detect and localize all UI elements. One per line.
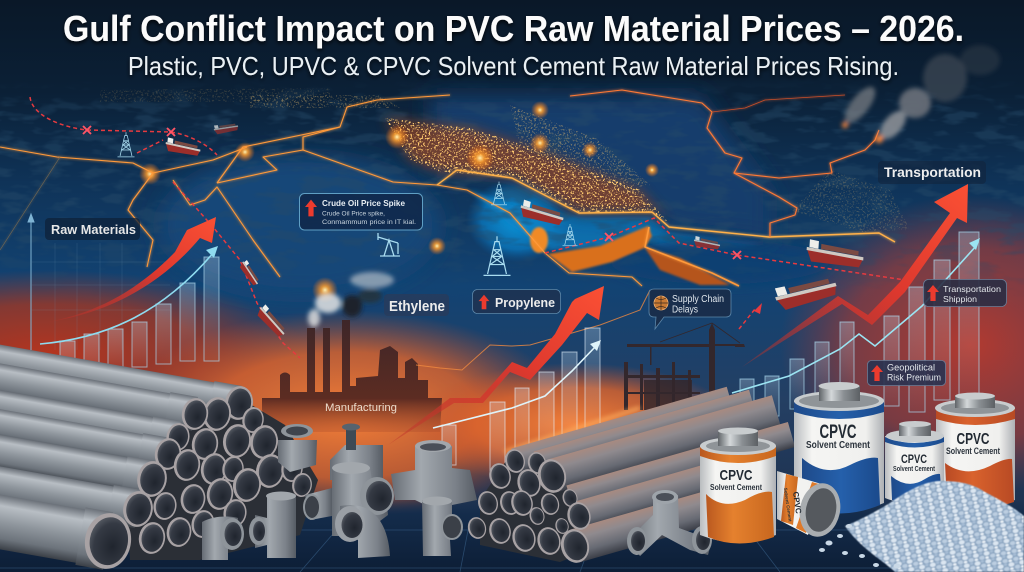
- bars: [740, 232, 979, 419]
- cyan arrow: [732, 245, 977, 393]
- callout: geopolitical risk premium: [868, 360, 946, 386]
- floor grid: [0, 520, 1024, 572]
- can: small blue solvent cement: CPVC: [901, 452, 927, 466]
- smoke: factory: [308, 272, 394, 327]
- axis: [28, 214, 34, 350]
- thin orange trace: [416, 290, 650, 370]
- construction site with crane: [624, 323, 745, 410]
- subtitle: Plastic, PVC, UPVC & CPVC Solvent Cement Raw Material Prices Rising.: [128, 51, 899, 81]
- label: ethylene: [384, 294, 449, 316]
- white arrow: [433, 346, 596, 428]
- can: large orange solvent cement: [935, 392, 1015, 508]
- bars: [442, 328, 600, 472]
- callout: supply chain delays: Delays: [672, 304, 698, 316]
- chart: raw materials rising: [28, 214, 219, 381]
- PVC resin pellet pile: [819, 481, 1024, 572]
- can: small blue solvent cement: Solvent Cement: [893, 466, 936, 473]
- chart: transportation rising: [732, 184, 980, 419]
- orange glow peninsula: UAE and Qatar: [530, 226, 730, 285]
- bars: [60, 257, 219, 381]
- fitting: right tee: [627, 490, 712, 556]
- water: Persian Gulf and Gulf of Oman: [466, 178, 830, 284]
- callout: supply chain delays: Supply Chain: [672, 294, 724, 305]
- grid lines: [32, 243, 170, 350]
- pipe ends: [465, 447, 594, 566]
- fitting: flange: [278, 424, 317, 472]
- can: orange solvent cement: CPVC: [720, 467, 753, 484]
- callout: transportation shipping: Shippion: [943, 294, 977, 304]
- left pipe stack: [0, 328, 318, 572]
- long pipes: [511, 387, 795, 562]
- label: manufacturing: Manufacturing: [325, 402, 397, 414]
- red arrow: [742, 184, 968, 367]
- label: propylene: [472, 290, 560, 314]
- can: orange solvent cement: Solvent Cement: [710, 482, 762, 492]
- can: orange solvent cement: [700, 428, 776, 544]
- fitting: elbow: [335, 505, 390, 558]
- callout: transportation shipping: [924, 280, 1006, 306]
- can: lying open can: CPVC: [791, 491, 803, 515]
- can: large orange solvent cement: CPVC: [956, 431, 990, 448]
- cyan arrow: [40, 252, 214, 344]
- dark backing: [480, 440, 640, 562]
- route arrowhead: [754, 303, 762, 314]
- borders and glowing coastlines: [0, 90, 895, 286]
- fitting: large tee: [304, 462, 394, 536]
- pipe ends: [81, 384, 314, 572]
- callout: crude oil price spike: Crude Oil Price spike,: [322, 210, 385, 218]
- can: small blue solvent cement: [885, 421, 944, 505]
- can: large orange solvent cement: Solvent Cement: [946, 446, 1000, 456]
- callout: transportation shipping: Transportation: [943, 284, 1001, 294]
- callout: geopolitical risk premium: Geopolitical: [887, 362, 935, 372]
- can: large blue solvent cement: CPVC: [820, 422, 857, 443]
- tanker ships: [165, 120, 864, 338]
- dark backing behind pipe ends: [125, 395, 318, 560]
- fitting: elbow left: [202, 517, 244, 560]
- oil derricks and pumpjack: [118, 132, 578, 275]
- callout: supply chain delays: [649, 289, 731, 329]
- can: large blue solvent cement: Solvent Cement: [806, 440, 871, 451]
- label: raw materials: Raw Materials: [51, 222, 136, 237]
- can: lying open can: Solvent Cement: [783, 487, 793, 522]
- fitting: valve: [330, 424, 383, 480]
- red arrow: [48, 217, 216, 322]
- scattered pellets: [819, 524, 900, 568]
- land: Iran terrain with city lights: [0, 80, 1024, 300]
- orange rim light along the top of the pipes: [505, 408, 640, 452]
- label: raw materials: [45, 218, 140, 240]
- factory silhouette: [262, 320, 442, 432]
- long pipes: [0, 328, 242, 570]
- callout: geopolitical risk premium: Risk Premium: [887, 372, 941, 382]
- label: ethylene: Ethylene: [389, 298, 445, 315]
- right pipe stack: [465, 387, 795, 566]
- callout: crude oil price spike: Conmammum price in IT kial.: [322, 219, 416, 226]
- city light glows: [139, 101, 659, 303]
- fitting: tee small: [422, 496, 462, 556]
- red arrow: [388, 286, 604, 445]
- red dashed shipping routes: [30, 97, 905, 358]
- title: Gulf Conflict Impact on PVC Raw Material Prices – 2026.: [63, 8, 964, 49]
- land: Arabia base tone: [160, 155, 440, 295]
- callout: crude oil price spike: Crude Oil Price Spike: [322, 198, 405, 208]
- fitting: cross tee: [391, 440, 477, 512]
- label: transportation: Transportation: [884, 165, 981, 180]
- can: lying open can: [777, 471, 845, 541]
- icon: globe: [654, 296, 668, 310]
- callout: crude oil price spike: [300, 194, 422, 230]
- PVC fittings: [202, 424, 477, 560]
- chart: propylene rising: [388, 286, 650, 472]
- can: large blue solvent cement: [794, 382, 884, 514]
- fitting: tee left: [249, 492, 296, 558]
- label: propylene: Propylene: [495, 295, 555, 310]
- smoke plumes: [308, 45, 1000, 327]
- smoke: top right: [839, 45, 1000, 144]
- route closure markers: [83, 126, 741, 259]
- label: transportation: [878, 161, 986, 184]
- map: land and water of the Gulf region: [0, 80, 1024, 358]
